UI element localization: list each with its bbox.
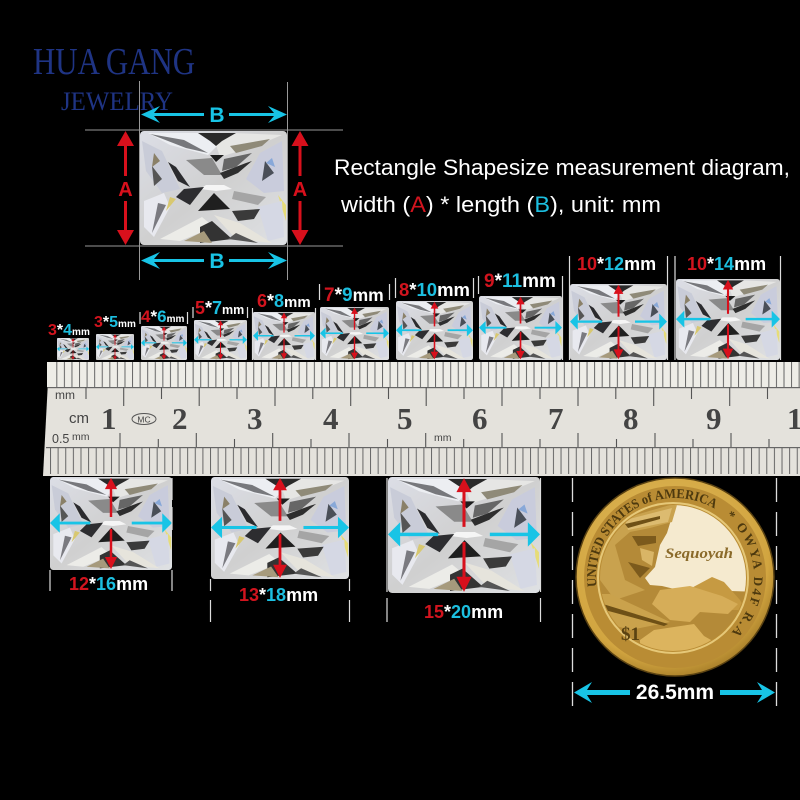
- description text: width (A) * length (B), unit: mm: [340, 192, 661, 217]
- coin portrait: [600, 505, 677, 600]
- ruler: cm: [69, 410, 89, 427]
- coin size guide: 26.5mm: [636, 681, 714, 704]
- ruler: 1: [101, 401, 116, 436]
- gem 3*4mm: [48, 322, 90, 360]
- gem 7*9mm: [320, 284, 390, 360]
- description text: Rectangle Shapesize measurement diagram,: [334, 155, 790, 180]
- arrow B top: [141, 104, 287, 127]
- gem 3*4mm: 3*4mm: [48, 322, 90, 339]
- ruler: 0.5: [52, 432, 69, 446]
- gem 9*11mm: [478, 271, 562, 360]
- arrow B bottom: B: [209, 250, 225, 273]
- gem 5*7mm: 5*7mm: [195, 298, 244, 318]
- gem 10*14mm: [675, 254, 780, 360]
- gem 13*18mm: [210, 477, 350, 622]
- ruler: mm: [434, 432, 452, 444]
- gem 4*6mm: 4*6mm: [141, 307, 184, 326]
- gem 15*20mm: 15*20mm: [424, 602, 503, 622]
- arrow A right: A: [293, 179, 307, 201]
- gem 15*20mm: [387, 477, 540, 622]
- gem 3*5mm: [94, 314, 136, 360]
- brand logo: HUA GANG: [33, 41, 195, 83]
- brand logo: JEWELRY: [61, 87, 173, 116]
- gem 3*5mm: 3*5mm: [94, 314, 136, 331]
- coin: Sequoyah: [665, 546, 733, 562]
- ruler: mm: [55, 388, 75, 402]
- ruler: 4: [323, 401, 338, 436]
- gem 4*6mm: [140, 307, 188, 360]
- main measurement diagram: [85, 81, 343, 280]
- ruler: 2: [172, 401, 188, 436]
- gem 10*12mm: 10*12mm: [577, 254, 656, 274]
- coin: $1: [621, 624, 640, 645]
- main gem: [140, 131, 287, 245]
- arrow A right: [292, 131, 308, 245]
- coin width arrows: [574, 682, 775, 703]
- ruler logo: [132, 414, 156, 424]
- coin size guide: [572, 478, 776, 710]
- coin mountain: [694, 577, 742, 610]
- gem 9*11mm: 9*11mm: [484, 271, 556, 292]
- ruler: 5: [397, 401, 412, 436]
- gem 13*18mm: 13*18mm: [239, 585, 318, 605]
- ruler: 7: [548, 401, 564, 436]
- coin: * OWYA D4F R.A: [730, 511, 763, 636]
- arrow A left: [117, 131, 134, 245]
- ruler: 9: [706, 401, 722, 436]
- gem 6*8mm: [252, 291, 316, 360]
- coin lower hand: [640, 624, 711, 651]
- coin: UNITED STATES of AMERICA: [587, 489, 716, 587]
- gem 8*10mm: [396, 278, 474, 360]
- arrow A left: A: [118, 179, 133, 201]
- gem 8*10mm: 8*10mm: [399, 279, 470, 300]
- brand logo: [33, 41, 195, 116]
- ruler: 6: [472, 401, 488, 436]
- ruler: [43, 362, 800, 476]
- ruler: 8: [623, 401, 638, 436]
- ruler: 3: [247, 401, 262, 436]
- gem 6*8mm: 6*8mm: [257, 291, 311, 311]
- coin feather: [602, 594, 670, 630]
- gem 7*9mm: 7*9mm: [324, 285, 384, 306]
- arrow B bottom: [141, 250, 287, 273]
- coin: [575, 477, 775, 677]
- gem 10*12mm: [570, 254, 668, 360]
- coin field: [600, 505, 746, 651]
- gem 10*14mm: 10*14mm: [687, 254, 766, 274]
- gem 12*16mm: [50, 477, 172, 594]
- arrow B top: B: [209, 104, 225, 127]
- gem 5*7mm: [193, 298, 248, 360]
- ruler logo: MC: [137, 414, 151, 424]
- gem 12*16mm: 12*16mm: [69, 574, 148, 594]
- coin upper hand: [652, 586, 738, 622]
- description text: [334, 155, 790, 217]
- ruler: mm: [72, 431, 90, 443]
